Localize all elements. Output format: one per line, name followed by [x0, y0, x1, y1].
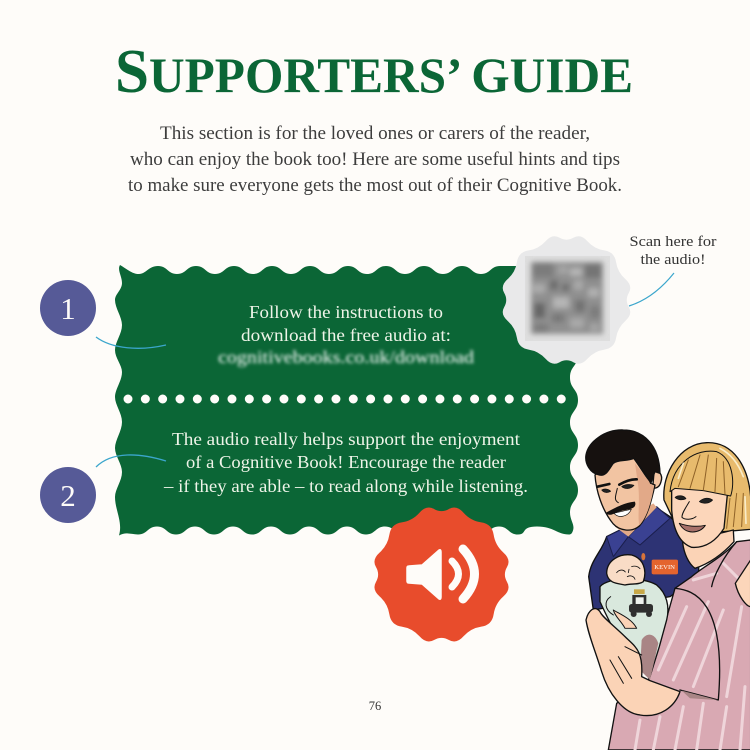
illustration: family with baby — [586, 430, 750, 750]
taxi icon — [629, 589, 653, 617]
badge shape — [374, 507, 509, 642]
intro text: This section is for the loved ones or carers of the reader, — [160, 124, 590, 144]
step 1 badge — [40, 280, 96, 336]
woman's lips — [679, 523, 705, 532]
step 2 badge: 2 — [60, 478, 76, 513]
woman's neck — [683, 530, 734, 568]
step 2 badge — [40, 467, 96, 523]
man's hair — [586, 430, 660, 483]
woman's nose — [682, 502, 696, 519]
name badge: KEVIN — [654, 564, 675, 571]
man's shirt — [589, 507, 699, 610]
woman's face — [672, 483, 728, 547]
woman's fringe — [670, 451, 733, 496]
scan caption — [630, 234, 716, 268]
baby's suit — [600, 579, 668, 677]
step 1 text: download the free audio at: — [241, 325, 451, 345]
man's brows — [597, 479, 637, 487]
name badge — [652, 560, 677, 574]
man's nose — [615, 488, 618, 503]
woman's shirt — [608, 540, 750, 750]
step 1 text: cognitivebooks.co.uk/download — [218, 347, 474, 367]
baby's head — [607, 555, 645, 585]
man's collar — [607, 507, 670, 557]
woman's finger lines — [610, 647, 642, 683]
step 1 text: Follow the instructions to — [249, 302, 443, 322]
connector: step 2 — [96, 455, 166, 467]
man's ear — [653, 471, 662, 488]
baby's hand — [613, 610, 637, 628]
shirt sleeve seam — [675, 542, 737, 700]
step 2 text — [163, 429, 528, 496]
man's neck — [615, 503, 657, 537]
man's smile — [614, 509, 631, 516]
shirt stripes — [635, 563, 747, 750]
hair strands — [678, 455, 743, 528]
scan caption: the audio! — [640, 252, 706, 268]
man's face — [595, 458, 655, 530]
baby's face — [617, 566, 640, 579]
connector: scan caption — [629, 273, 674, 306]
speaker — [407, 550, 441, 599]
connector: step 1 — [96, 337, 166, 348]
QR code badge — [503, 236, 630, 364]
sleeve shadow — [682, 691, 717, 700]
woman's brows and eyes — [675, 496, 713, 503]
step 2 text: The audio really helps support the enjoyment — [172, 429, 520, 449]
sound waves — [452, 561, 458, 587]
step 2 text: of a Cognitive Book! Encourage the reader — [186, 452, 506, 472]
dotted divider — [128, 394, 562, 404]
baby's leg shadow — [640, 635, 658, 680]
blurred QR code — [531, 262, 603, 334]
QR frame — [525, 256, 610, 341]
step 1 text — [218, 302, 474, 367]
hair highlights — [678, 448, 746, 523]
woman's arm and hand — [586, 609, 680, 716]
baby's arm outline — [606, 597, 613, 615]
intro text — [128, 124, 622, 196]
intro text: who can enjoy the book too! Here are some useful hints and tips — [130, 150, 620, 170]
title: SUPPORTERS’ GUIDE — [115, 38, 633, 106]
panel: green wavy steps panel — [115, 265, 578, 536]
woman's far hand — [735, 560, 750, 607]
shirt button — [641, 553, 645, 560]
badge shape — [503, 236, 630, 364]
intro text: to make sure everyone gets the most out of their Cognitive Book. — [128, 176, 622, 196]
page number: 76 — [369, 699, 381, 713]
man's eyes — [602, 484, 634, 492]
icon: audio badge — [374, 507, 509, 642]
panel shape — [115, 265, 578, 536]
man's face shading — [635, 463, 654, 525]
man's moustache — [607, 502, 635, 514]
man — [586, 430, 699, 610]
scan caption: Scan here for — [630, 234, 716, 250]
step 2 text: – if they are able – to read along while listening. — [163, 476, 528, 496]
woman's hair — [664, 443, 750, 532]
step 1 badge: 1 — [60, 291, 76, 326]
